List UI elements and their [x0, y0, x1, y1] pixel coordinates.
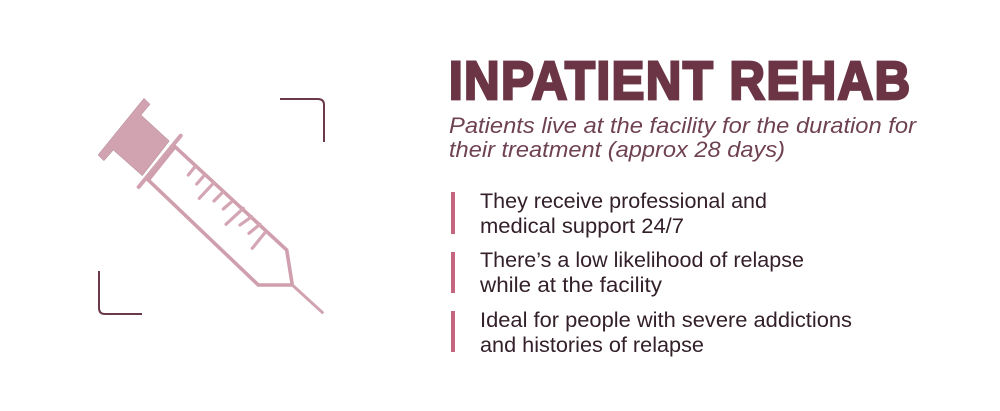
bullet 2: [451, 249, 804, 297]
icon: syringe: [98, 98, 323, 313]
bullet text 2: while at the facility: [479, 274, 663, 297]
bullet text 1: [480, 190, 767, 238]
syringe needle: [292, 285, 323, 313]
subtitle: [449, 113, 918, 162]
bullet text 3: Ideal for people with severe addictions: [480, 309, 852, 332]
title: INPATIENT REHAB: [449, 50, 910, 111]
corner bracket: top right: [280, 99, 324, 142]
subtitle: Patients live at the facility for the duration for: [449, 113, 918, 138]
bullet text 1: They receive professional and: [480, 190, 767, 213]
syringe barrel: [148, 147, 292, 285]
bullet 1: [451, 190, 767, 238]
syringe plunger: [98, 98, 169, 176]
syringe flange: [139, 136, 181, 187]
syringe measurement ticks: [188, 167, 266, 248]
bullet marker 1: [451, 192, 455, 234]
bullet marker 2: [451, 252, 455, 293]
bullet text 2: There’s a low likelihood of relapse: [480, 249, 804, 272]
bullet text 3: and histories of relapse: [480, 334, 704, 357]
bullet text 2: [479, 249, 804, 297]
subtitle: their treatment (approx 28 days): [449, 137, 785, 162]
corner bracket: bottom left: [99, 271, 142, 314]
bullet marker 3: [451, 311, 455, 352]
bullet 3: [451, 309, 852, 357]
bullet text 3: [480, 309, 852, 357]
bullet text 1: medical support 24/7: [480, 215, 684, 238]
